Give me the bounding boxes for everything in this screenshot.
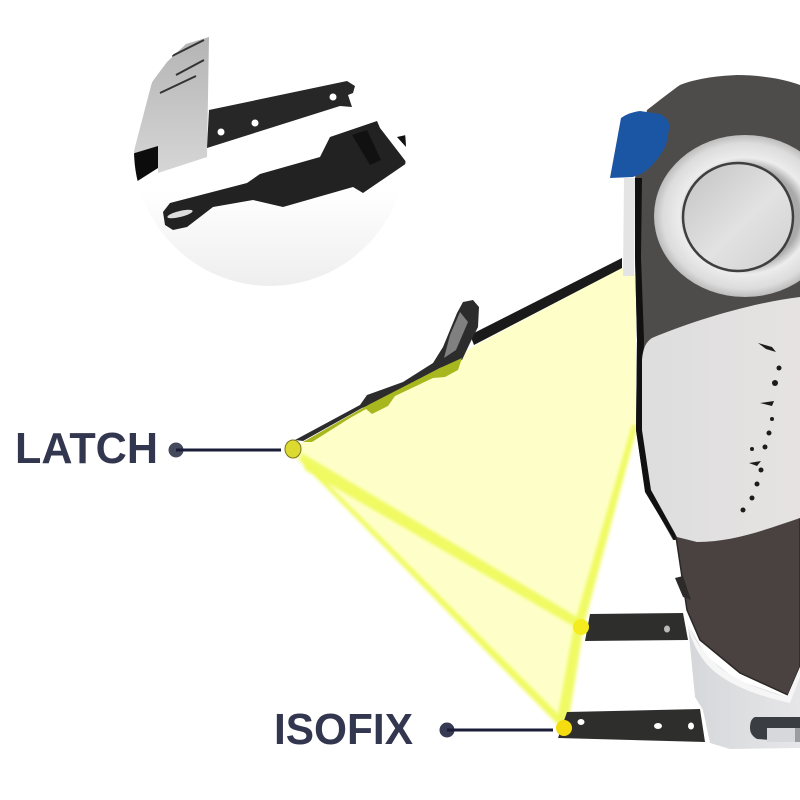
silver side-impact ring bbox=[654, 135, 800, 297]
upper ISOFIX yellow anchor bbox=[573, 619, 589, 635]
silver side trim bbox=[623, 178, 635, 276]
lower dark panel bbox=[675, 510, 800, 695]
base slot bbox=[750, 717, 800, 742]
round button bbox=[683, 163, 793, 271]
LATCH anchor dot bbox=[285, 440, 301, 458]
seat base bbox=[688, 625, 800, 749]
light grey body panel bbox=[642, 297, 800, 542]
latch hook on tether bbox=[295, 300, 479, 441]
upper ISOFIX connector bbox=[585, 613, 688, 641]
seat back shell bbox=[635, 75, 800, 540]
side clip bbox=[675, 576, 691, 600]
yellow zone edge beams bbox=[291, 425, 638, 727]
seat back black edge bbox=[635, 178, 678, 540]
LATCH label: LATCH bbox=[15, 424, 158, 473]
blue headrest tab bbox=[610, 111, 669, 178]
base white trim bbox=[686, 618, 800, 703]
ISOFIX leader line bbox=[440, 722, 553, 738]
top tether strap bbox=[295, 258, 622, 442]
lower ISOFIX yellow anchor bbox=[556, 720, 572, 736]
lower ISOFIX connector bbox=[558, 709, 705, 742]
LATCH leader line bbox=[168, 442, 281, 458]
upper metal strap bbox=[207, 81, 355, 148]
seat shell corner bbox=[133, 37, 209, 173]
ISOFIX label: ISOFIX bbox=[274, 705, 413, 754]
lower latch buckle bbox=[163, 121, 407, 230]
panel vent dots bbox=[740, 343, 782, 512]
yellow-green underside of latch bbox=[303, 358, 462, 442]
inset circle: latch connector close-up bbox=[134, 37, 406, 286]
yellow anchor zone bbox=[291, 268, 638, 727]
